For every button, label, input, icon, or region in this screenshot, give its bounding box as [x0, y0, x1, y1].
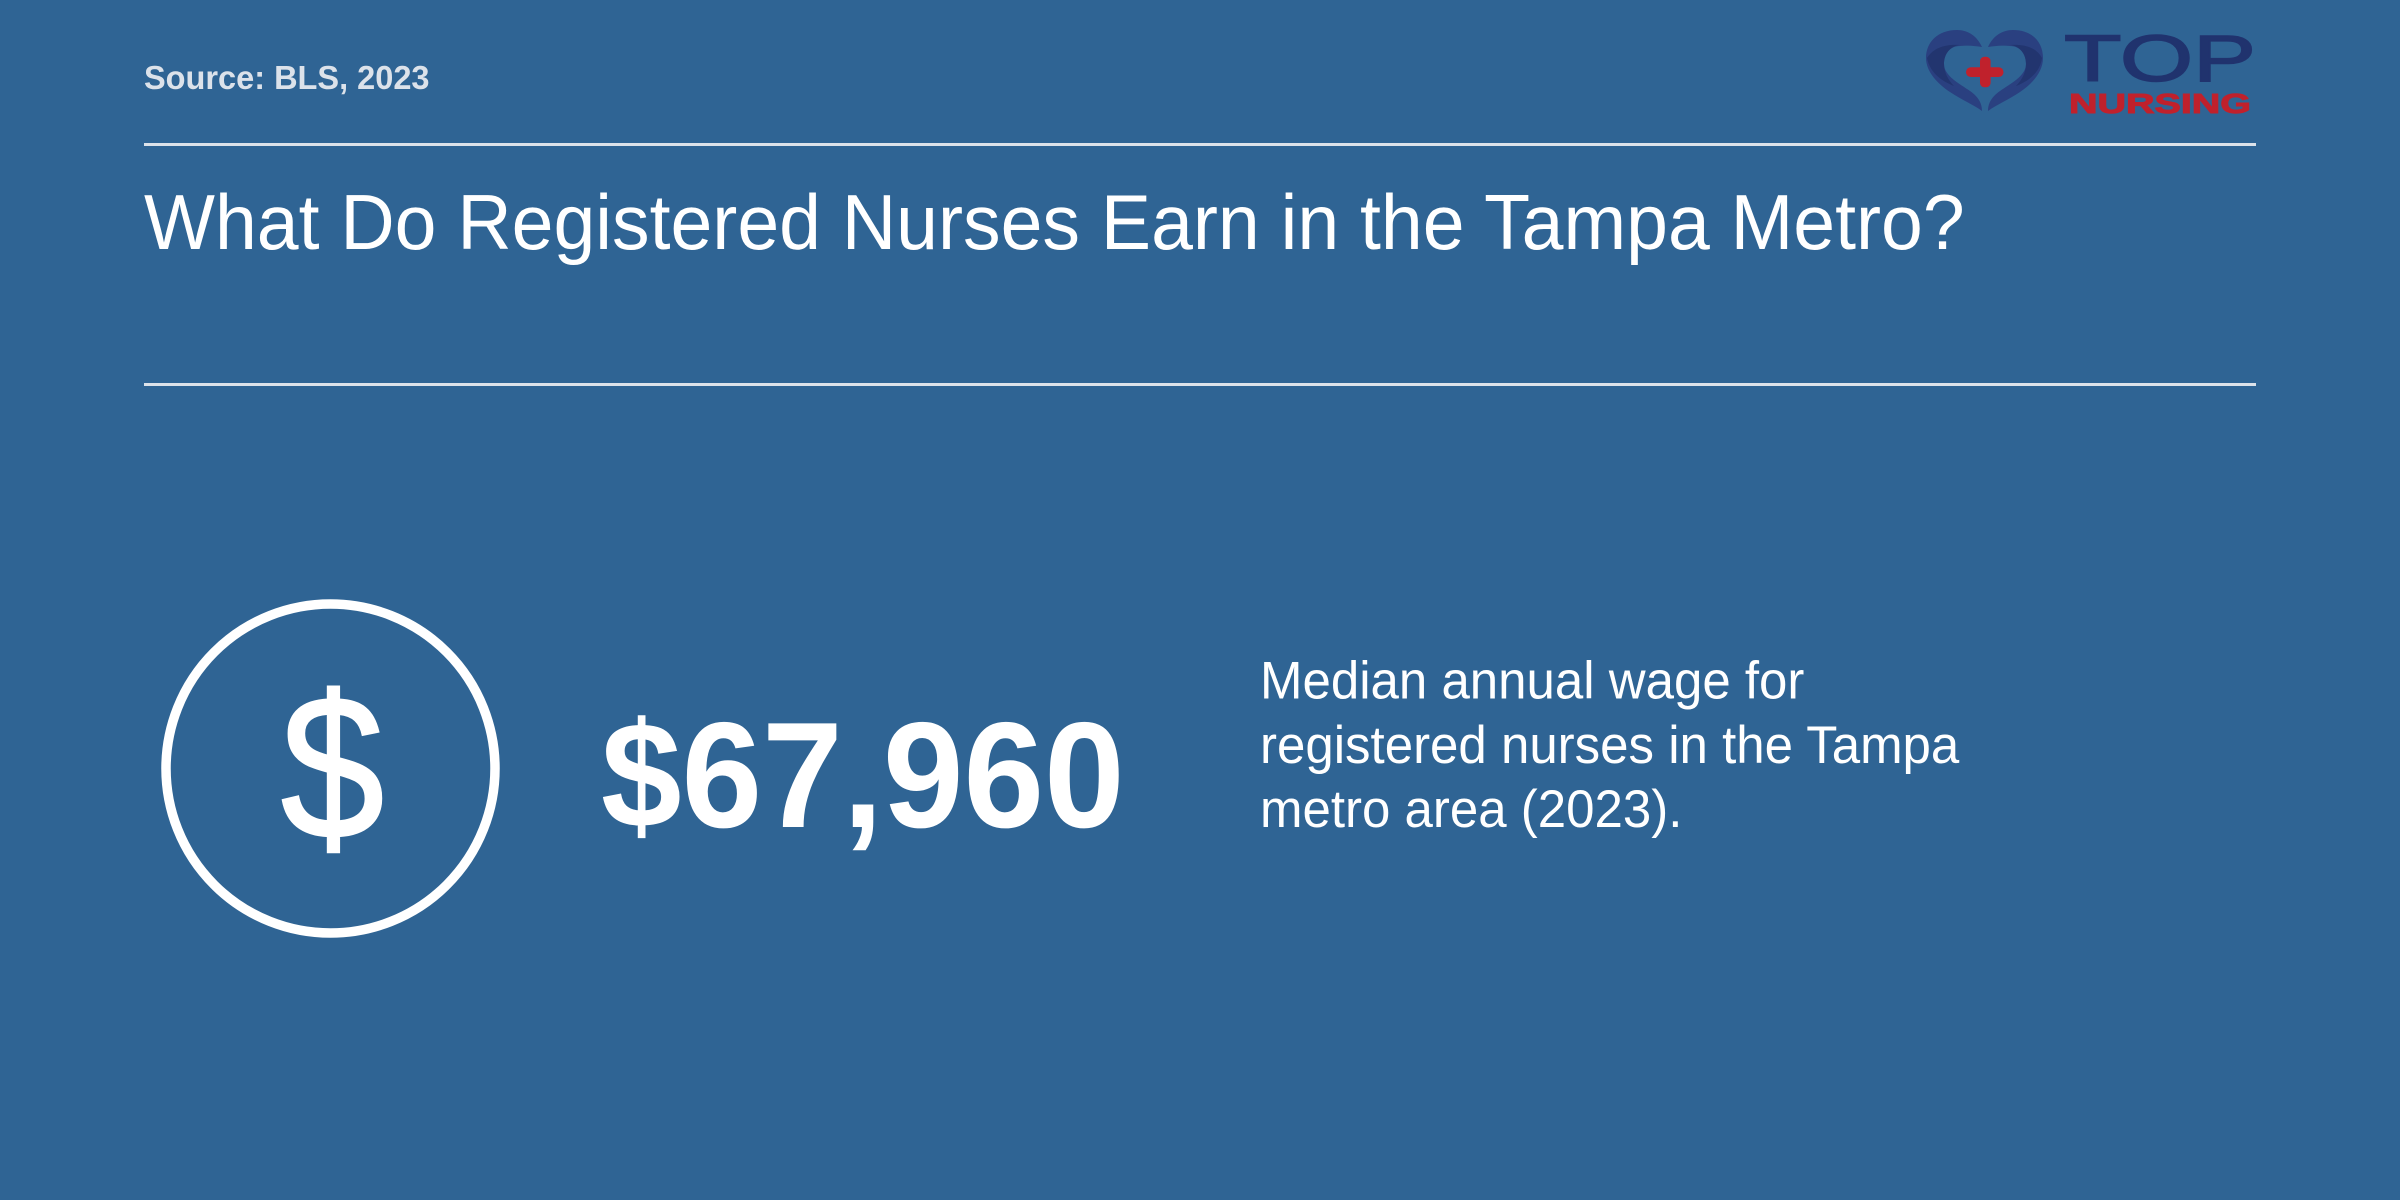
wordmark: NURSING: NURSING — [2069, 88, 2251, 119]
wage description: metro area (2023). — [1260, 779, 1682, 838]
wage description — [1260, 651, 1960, 838]
wage figure: $67,960 — [601, 691, 1125, 859]
source note: Source: BLS, 2023 — [144, 59, 429, 96]
top divider — [144, 143, 2256, 146]
dollar sign: $ — [281, 654, 384, 882]
icon: dollar in circle — [161, 599, 500, 938]
title: What Do Registered Nurses Earn in the Tampa Metro? — [144, 178, 1965, 265]
wage description: registered nurses in the Tampa — [1260, 715, 1959, 774]
wage description: Median annual wage for — [1260, 651, 1804, 710]
logo: Top Nursing — [1926, 24, 2256, 119]
circle outline — [166, 604, 495, 933]
lower divider — [144, 383, 2256, 386]
icon: heart with cross — [1926, 30, 2043, 111]
